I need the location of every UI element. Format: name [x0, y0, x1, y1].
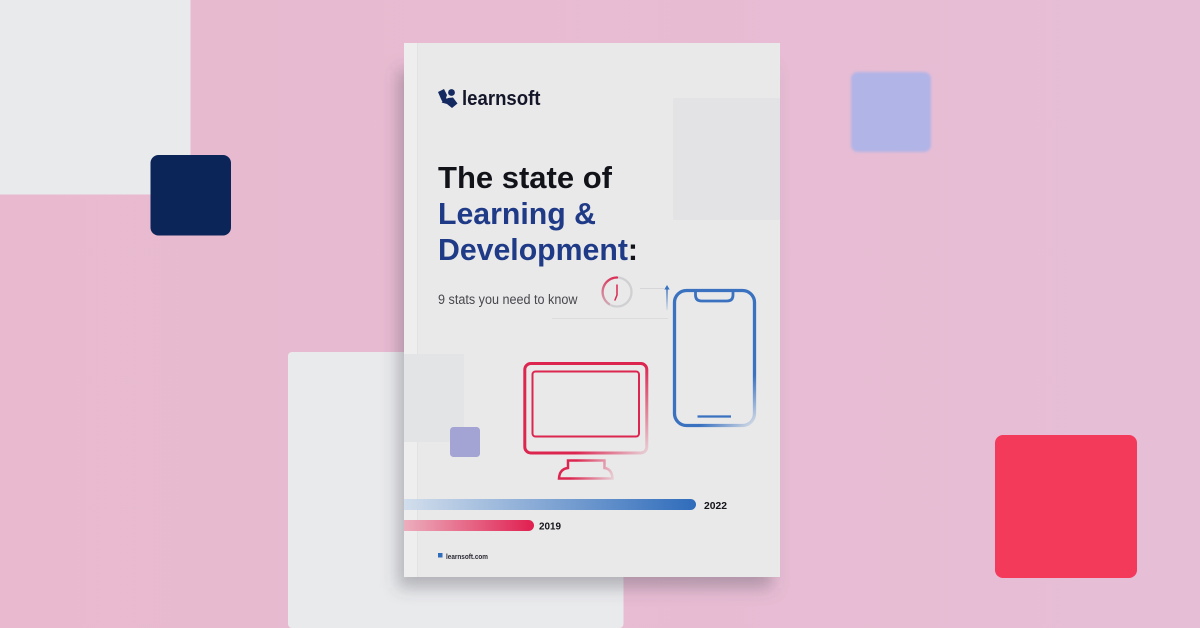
bar: 2022: [404, 499, 727, 512]
title line 1: The state of: [438, 160, 613, 195]
icon: clock: [602, 278, 632, 306]
icon: footer square: [438, 553, 442, 558]
label 2019: 2019: [539, 520, 561, 532]
square: navy: [150, 155, 231, 236]
footer text: learnsoft.com: [446, 552, 488, 561]
cover grey block: [673, 98, 780, 220]
connector line: [640, 288, 664, 290]
label 2022: 2022: [704, 500, 727, 512]
footer url: [438, 552, 488, 561]
book shadow: [398, 70, 772, 588]
icon: monitor: [525, 364, 647, 478]
logo: [438, 88, 541, 110]
square: red: [995, 435, 1137, 578]
spine band: [404, 43, 417, 577]
square: lilac: [851, 72, 931, 152]
icon: phone: [674, 290, 754, 426]
cover grey block lower-left: [404, 354, 464, 442]
title line 2: Learning &: [438, 196, 596, 231]
logo wordmark: learnsoft: [462, 88, 541, 110]
title: [438, 160, 638, 267]
icon: learnsoft mark: [438, 89, 458, 108]
cover lilac square: [450, 427, 480, 457]
book cover: [404, 43, 780, 577]
title line 3: Development:: [438, 232, 638, 267]
bar: 2019: [404, 520, 561, 532]
icon: up arrow: [664, 285, 670, 310]
subtitle: 9 stats you need to know: [438, 292, 578, 307]
cover page: [404, 43, 780, 577]
panel: lower white block behind book: [288, 352, 624, 628]
divider line: [552, 318, 668, 320]
panel: top-left white block: [0, 0, 190, 194]
